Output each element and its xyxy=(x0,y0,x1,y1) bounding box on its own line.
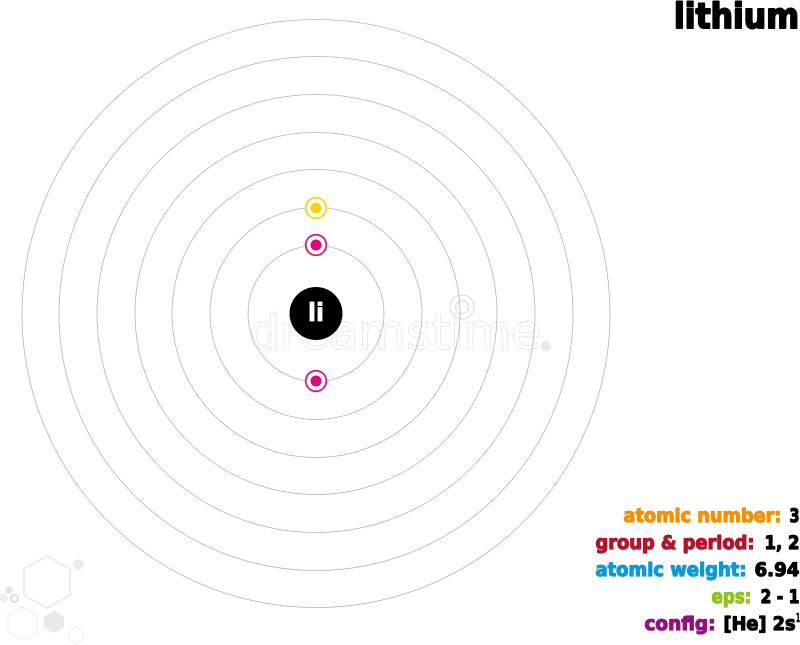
config row: config: xyxy=(644,613,716,635)
atomic weight row: 6.94 xyxy=(754,559,800,581)
config row xyxy=(644,611,800,635)
atomic number row: atomic number: xyxy=(624,505,782,527)
nucleus: li xyxy=(308,298,324,327)
group and period row: group & period: xyxy=(596,532,754,554)
electron: yellow outer shell xyxy=(306,198,326,218)
config row: [He] 2s xyxy=(724,613,796,635)
electron: magenta inner shell top xyxy=(306,235,326,255)
electron orbit rings xyxy=(22,20,610,608)
atomic weight row: atomic weight: xyxy=(596,559,746,581)
eps row: eps: xyxy=(712,586,752,608)
decorative hexagon cluster xyxy=(0,556,83,644)
electron: magenta inner shell bottom xyxy=(306,371,326,391)
nucleus xyxy=(290,287,342,340)
eps row xyxy=(712,586,800,608)
watermark: dreamstime xyxy=(249,305,541,361)
